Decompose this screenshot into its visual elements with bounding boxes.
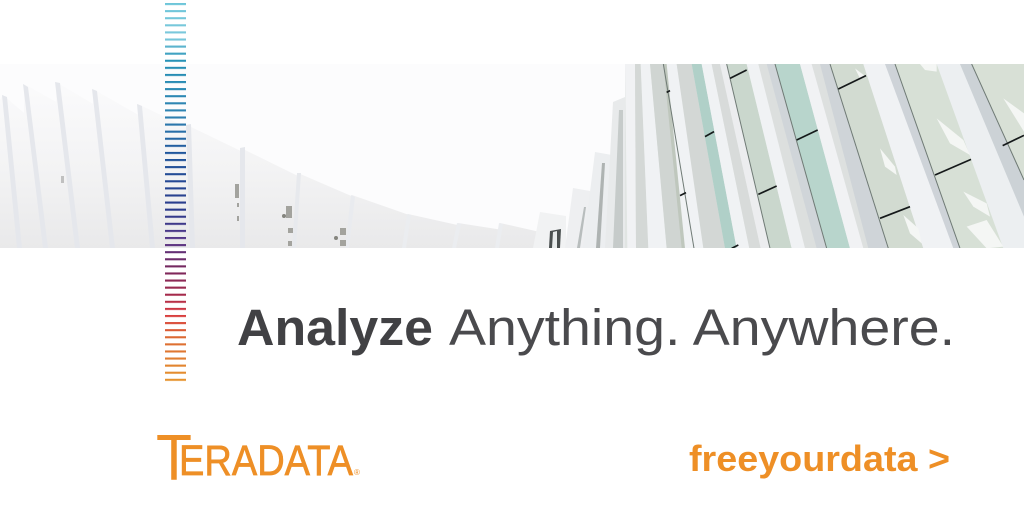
dark horizontal mullions [667, 70, 1024, 248]
headline: Analyze [237, 299, 433, 356]
Teradata logo [156, 421, 360, 494]
colour gradient bar column [165, 3, 186, 382]
photo: white building facade [0, 64, 1024, 248]
Teradata logo: ERADATA [179, 437, 353, 485]
rising fins near the centre [533, 97, 625, 248]
window frame lines [663, 64, 1024, 248]
headline: Anything. Anywhere. [449, 299, 955, 356]
headline [237, 299, 955, 356]
Teradata logo: ® [354, 468, 360, 477]
curved white fins on the left [0, 82, 540, 248]
reflections in the glass [855, 64, 1024, 248]
Teradata logo: T [156, 421, 192, 494]
call to action: freeyourdata > [689, 438, 950, 479]
fin brackets [61, 176, 346, 246]
glass and steel facade on the right [625, 64, 1024, 248]
